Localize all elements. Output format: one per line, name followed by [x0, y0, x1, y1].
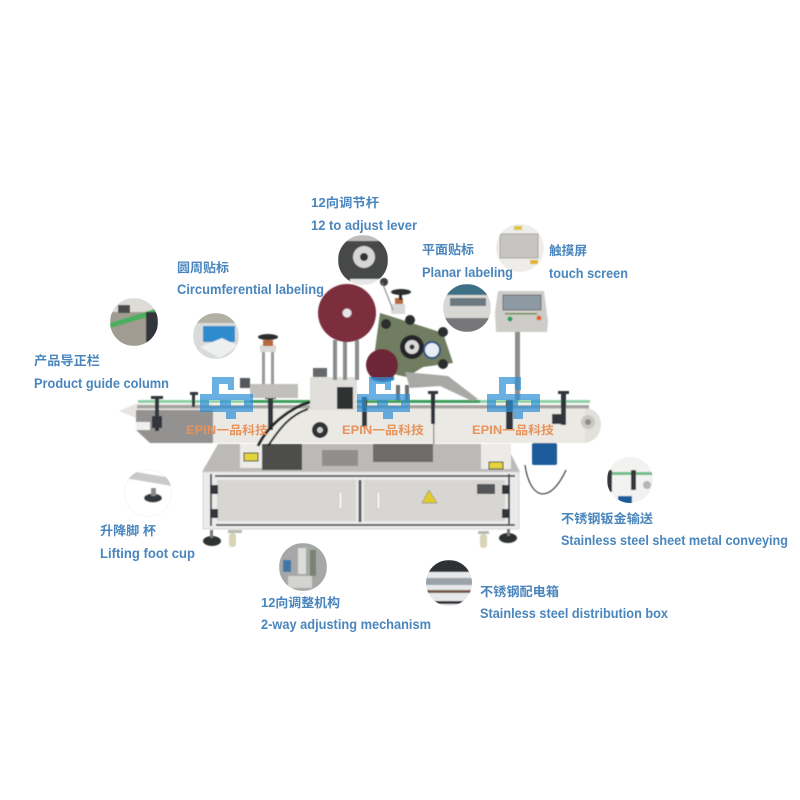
label: distribution box: 不锈钢配电箱 — [480, 584, 559, 599]
label: product guide column — [34, 353, 169, 391]
watermark brand text: EPIN一品科技 — [472, 423, 555, 437]
label: distribution box — [480, 584, 668, 621]
conveyor body — [119, 400, 601, 443]
label: planar labeling: Planar labeling — [422, 265, 513, 280]
thumbnail: distribution box — [425, 560, 473, 606]
table base cabinet — [202, 444, 520, 529]
red label roll — [318, 284, 376, 342]
label: product guide column: 产品导正栏 — [34, 353, 100, 368]
label: adjusting mechanism: 2-way adjusting mechanism — [261, 617, 431, 632]
watermark brand text — [186, 423, 555, 437]
thumbnail: product guide — [110, 298, 158, 346]
label: touch screen: 触摸屏 — [549, 243, 587, 258]
thumbnail: foot cup — [124, 469, 172, 517]
thumbnail: circumferential labeling — [193, 313, 239, 359]
label: lifting foot cup — [100, 523, 195, 561]
label: product guide column: Product guide column — [34, 376, 169, 391]
label: adjusting mechanism: 12向调整机构 — [261, 595, 340, 610]
circumferential labeling head — [240, 334, 357, 446]
feet and casters — [203, 529, 517, 548]
label: planar labeling — [422, 242, 513, 280]
motor — [525, 443, 566, 494]
watermark brand text: EPIN一品科技 — [186, 423, 269, 437]
label: sheet metal conveying — [561, 511, 788, 548]
label: sheet metal conveying: 不锈钢钣金输送 — [561, 511, 654, 526]
guide brackets — [151, 391, 569, 444]
label: circumferential labeling: 圆周贴标 — [177, 260, 230, 275]
thumbnail: touch screen — [496, 224, 544, 272]
label: adjusting mechanism — [261, 595, 431, 632]
thumbnail: sheet metal conveying — [607, 457, 653, 503]
thumbnail: adjusting mechanism — [279, 543, 327, 591]
label: circumferential labeling — [177, 260, 324, 297]
infographic canvas — [34, 196, 788, 632]
label: sheet metal conveying: Stainless steel sheet metal conveying — [561, 533, 788, 548]
label: adjust lever: 12 to adjust lever — [311, 218, 418, 233]
label: distribution box: Stainless steel distribution box — [480, 606, 668, 621]
label: touch screen — [549, 243, 628, 281]
watermark brand text: EPIN一品科技 — [342, 423, 425, 437]
label: circumferential labeling: Circumferential labeling — [177, 282, 324, 297]
label: adjust lever — [311, 195, 418, 233]
thumbnail: planar labeling — [443, 284, 491, 332]
machine — [119, 278, 601, 548]
label: lifting foot cup: 升降脚 杯 — [100, 523, 157, 538]
label: planar labeling: 平面贴标 — [422, 242, 475, 257]
watermark logos — [200, 377, 540, 419]
label: adjust lever: 12向调节杆 — [311, 195, 380, 210]
label: touch screen: touch screen — [549, 266, 628, 281]
label: lifting foot cup: Lifting foot cup — [100, 546, 195, 561]
top labeling head — [318, 278, 478, 401]
thumbnail: adjust lever — [338, 235, 388, 285]
touch screen — [495, 291, 548, 400]
